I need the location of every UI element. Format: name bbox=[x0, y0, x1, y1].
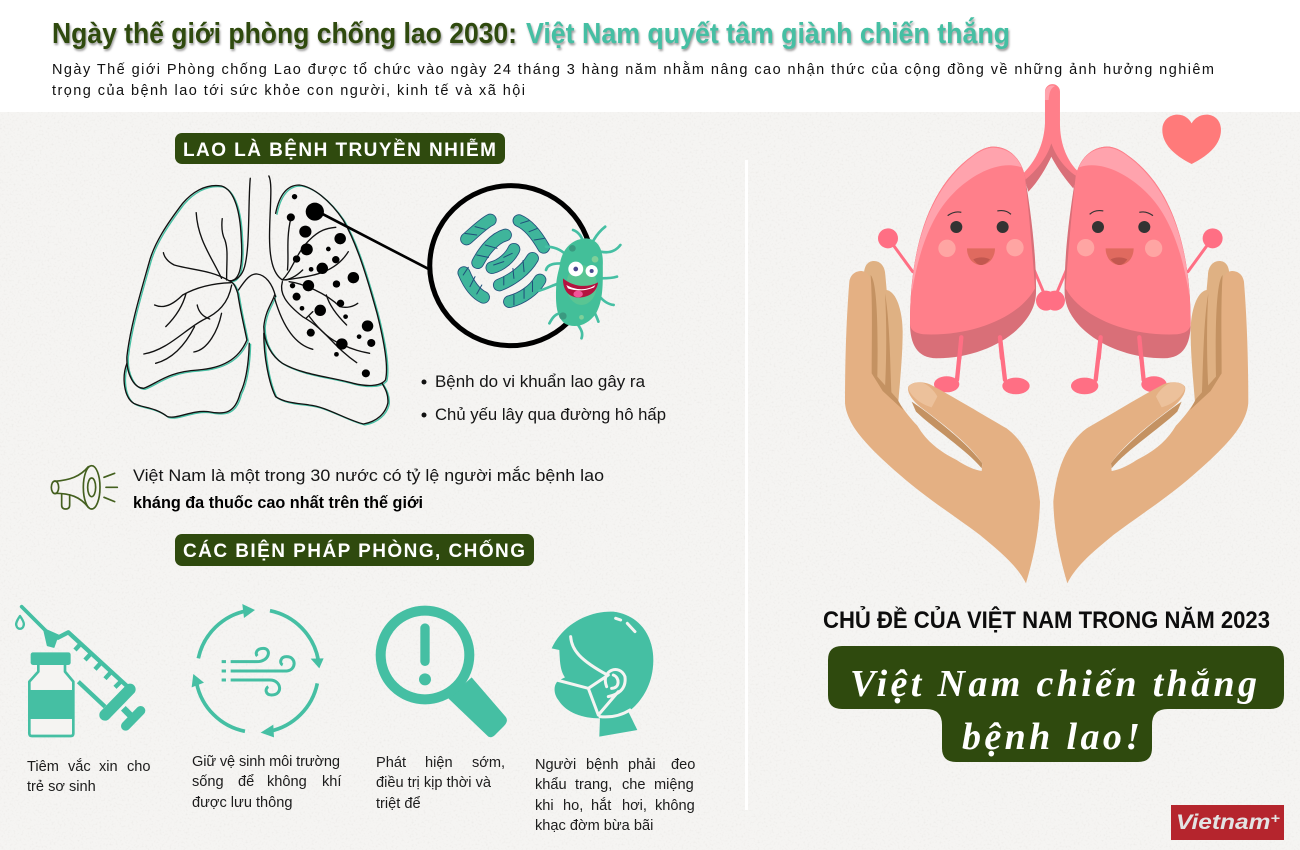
measure 3 caption: điều trị kịp thời và bbox=[376, 775, 492, 791]
title bbox=[52, 16, 1010, 50]
measure 2 caption: khí bbox=[322, 774, 341, 790]
clasped hands bbox=[1036, 291, 1065, 311]
icon: head wearing mask bbox=[552, 612, 653, 737]
measure 1 caption: vắc bbox=[68, 758, 91, 775]
measure 3 caption: Phát bbox=[376, 755, 406, 771]
measure 4 caption: bệnh bbox=[586, 757, 618, 773]
measure 1 caption: xin bbox=[99, 759, 118, 775]
measure 3 caption: triệt để bbox=[376, 796, 421, 812]
measure 2 caption: Giữ vệ sinh môi trường bbox=[192, 754, 340, 770]
heading: tuberculosis is contagious bbox=[175, 133, 505, 164]
theme slogan banner: Việt Nam chiến thắng bbox=[850, 663, 1257, 705]
measure 1 caption: trẻ sơ sinh bbox=[27, 779, 96, 795]
measure 4 caption: hắt bbox=[591, 797, 611, 814]
measure 4 caption: trang, bbox=[575, 777, 612, 793]
icon: vaccine syringe and vial bbox=[16, 607, 141, 736]
measure 4 caption: đeo bbox=[671, 757, 695, 773]
theme slogan banner: bệnh lao! bbox=[962, 716, 1140, 758]
pointer line bbox=[321, 213, 430, 270]
measure 4 caption: khẩu bbox=[535, 777, 567, 793]
bullet list: Chủ yếu lây qua đường hô hấp bbox=[435, 405, 666, 424]
measure 4 caption: phải bbox=[628, 757, 656, 773]
heading: prevention measures: CÁC BIỆN PHÁP PHÒNG, CHỐNG bbox=[183, 540, 525, 562]
icon: megaphone bbox=[51, 466, 117, 509]
measure 1 caption: cho bbox=[127, 759, 151, 775]
logo: Vietnam+ bbox=[1171, 805, 1284, 840]
intro paragraph: trọng của bệnh lao tới sức khỏe con người, kinh tế và xã hội bbox=[52, 83, 525, 99]
measure 1 caption: Tiêm bbox=[27, 759, 59, 775]
bullet list bbox=[422, 372, 666, 424]
heading: prevention measures bbox=[175, 534, 534, 566]
measure 4 caption: Người bbox=[535, 757, 576, 773]
statement about multidrug resistance: Việt Nam là một trong 30 nước có tỷ lệ người mắc bệnh lao bbox=[133, 466, 604, 485]
logo: Vietnam+: Vietnam bbox=[1176, 811, 1257, 834]
measure 4 caption: không bbox=[655, 798, 695, 814]
trachea bbox=[1023, 84, 1077, 192]
measure 4 caption: ho, bbox=[563, 798, 583, 814]
icon: magnifier with exclamation mark bbox=[381, 611, 507, 737]
illustration: left cupped hand bbox=[845, 261, 1040, 583]
intro paragraph: Ngày Thế giới Phòng chống Lao được tổ chức vào ngày 24 tháng 3 hàng năm nhằm nâng cao nhận thức của cộng đồng về những ảnh hưởng nghiêm bbox=[52, 61, 1214, 78]
measure 4 caption: khi bbox=[535, 798, 554, 814]
icon: air circulation bbox=[192, 604, 324, 737]
cartoon germ bbox=[539, 227, 620, 338]
measure 2 caption: được lưu thông bbox=[192, 795, 293, 811]
left lung character bbox=[878, 147, 1044, 394]
right lung character bbox=[1057, 147, 1223, 394]
statement about multidrug resistance bbox=[133, 466, 604, 512]
heading: tuberculosis is contagious: LAO LÀ BỆNH TRUYỀN NHIỄM bbox=[183, 139, 496, 161]
logo: Vietnam+: + bbox=[1270, 810, 1280, 826]
theme slogan banner bbox=[828, 646, 1284, 762]
measure 4 caption: che bbox=[622, 777, 646, 793]
measure 2 caption: sống bbox=[192, 774, 224, 790]
lung line drawing with lesions bbox=[124, 176, 620, 425]
statement about multidrug resistance: kháng đa thuốc cao nhất trên thế giới bbox=[133, 493, 423, 512]
measure 2 caption: không bbox=[267, 774, 307, 790]
measure 3 caption: sớm, bbox=[472, 755, 505, 771]
illustration: smiling lungs bbox=[878, 84, 1223, 394]
measure 4 caption: hơi, bbox=[622, 798, 647, 814]
magnifier circle bbox=[430, 186, 592, 346]
illustration: right cupped hand bbox=[1053, 261, 1248, 583]
lung outlines and airways bbox=[124, 176, 388, 424]
title: Việt Nam quyết tâm giành chiến thắng bbox=[526, 16, 1010, 50]
title: Ngày thế giới phòng chống lao 2030: bbox=[52, 18, 517, 50]
bullet list: Bệnh do vi khuẩn lao gây ra bbox=[435, 372, 646, 391]
theme heading: CHỦ ĐỀ CỦA VIỆT NAM TRONG NĂM 2023 bbox=[823, 605, 1270, 634]
lung outlines teal offset bbox=[125, 186, 389, 425]
measure 2 caption: để bbox=[238, 774, 254, 790]
intro paragraph bbox=[52, 61, 1214, 99]
icon: heart bbox=[1162, 115, 1221, 164]
bacilli rods bbox=[463, 220, 544, 305]
lesions bbox=[287, 194, 375, 377]
measure 4 caption: khạc đờm bừa bãi bbox=[535, 818, 653, 834]
measure 3 caption: hiện bbox=[425, 755, 453, 771]
measure 4 caption: miệng bbox=[654, 777, 694, 793]
